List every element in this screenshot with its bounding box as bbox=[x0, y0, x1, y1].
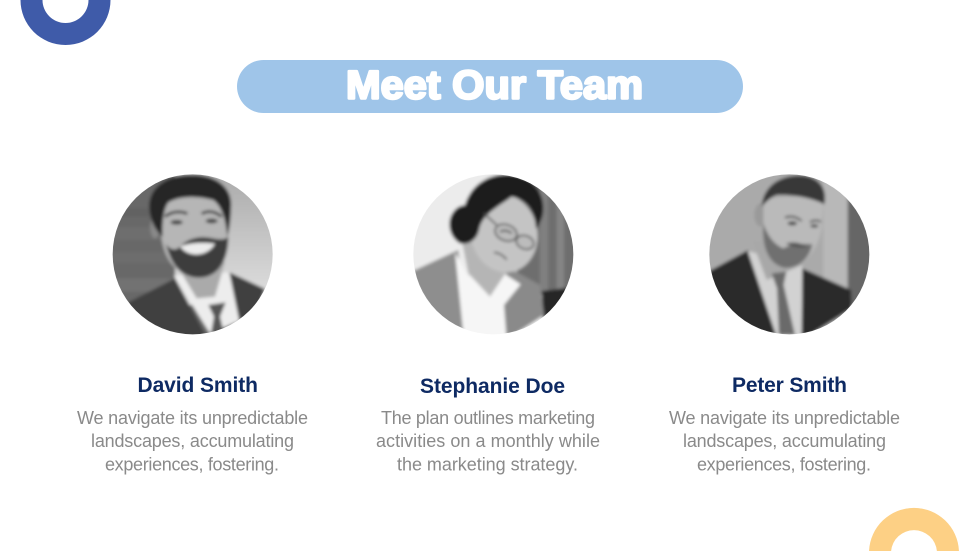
team member: David Smith bbox=[77, 374, 308, 474]
bio: David Smith: landscapes, accumulating bbox=[91, 431, 294, 451]
title: Meet Our Team bbox=[346, 64, 643, 108]
team member: Stephanie Doe bbox=[376, 375, 600, 474]
bio: David Smith bbox=[77, 408, 308, 474]
decorative ring: top left bbox=[20, 0, 111, 45]
team member: Peter Smith bbox=[669, 374, 900, 474]
bio: Stephanie Doe: activities on a monthly while bbox=[376, 431, 600, 451]
portrait: David Smith bbox=[112, 174, 273, 334]
portrait: Peter Smith bbox=[709, 174, 870, 334]
bio: Stephanie Doe: The plan outlines marketing bbox=[381, 408, 595, 428]
name: Peter Smith: Peter Smith bbox=[732, 374, 847, 397]
portrait: Stephanie Doe bbox=[414, 174, 574, 334]
bio: Stephanie Doe: the marketing strategy. bbox=[397, 454, 578, 474]
bio: Peter Smith bbox=[669, 408, 900, 474]
decorative ring: bottom right bbox=[869, 508, 959, 551]
bio: Peter Smith: landscapes, accumulating bbox=[683, 431, 886, 451]
bio: David Smith: experiences, fostering. bbox=[105, 454, 279, 474]
bio: David Smith: We navigate its unpredictable bbox=[77, 408, 308, 428]
bio: Peter Smith: We navigate its unpredictable bbox=[669, 408, 900, 428]
name: Stephanie Doe: Stephanie Doe bbox=[420, 375, 565, 398]
bio: Peter Smith: experiences, fostering. bbox=[697, 454, 871, 474]
name: David Smith: David Smith bbox=[138, 374, 258, 397]
bio: Stephanie Doe bbox=[376, 408, 600, 474]
title banner bbox=[237, 60, 743, 113]
